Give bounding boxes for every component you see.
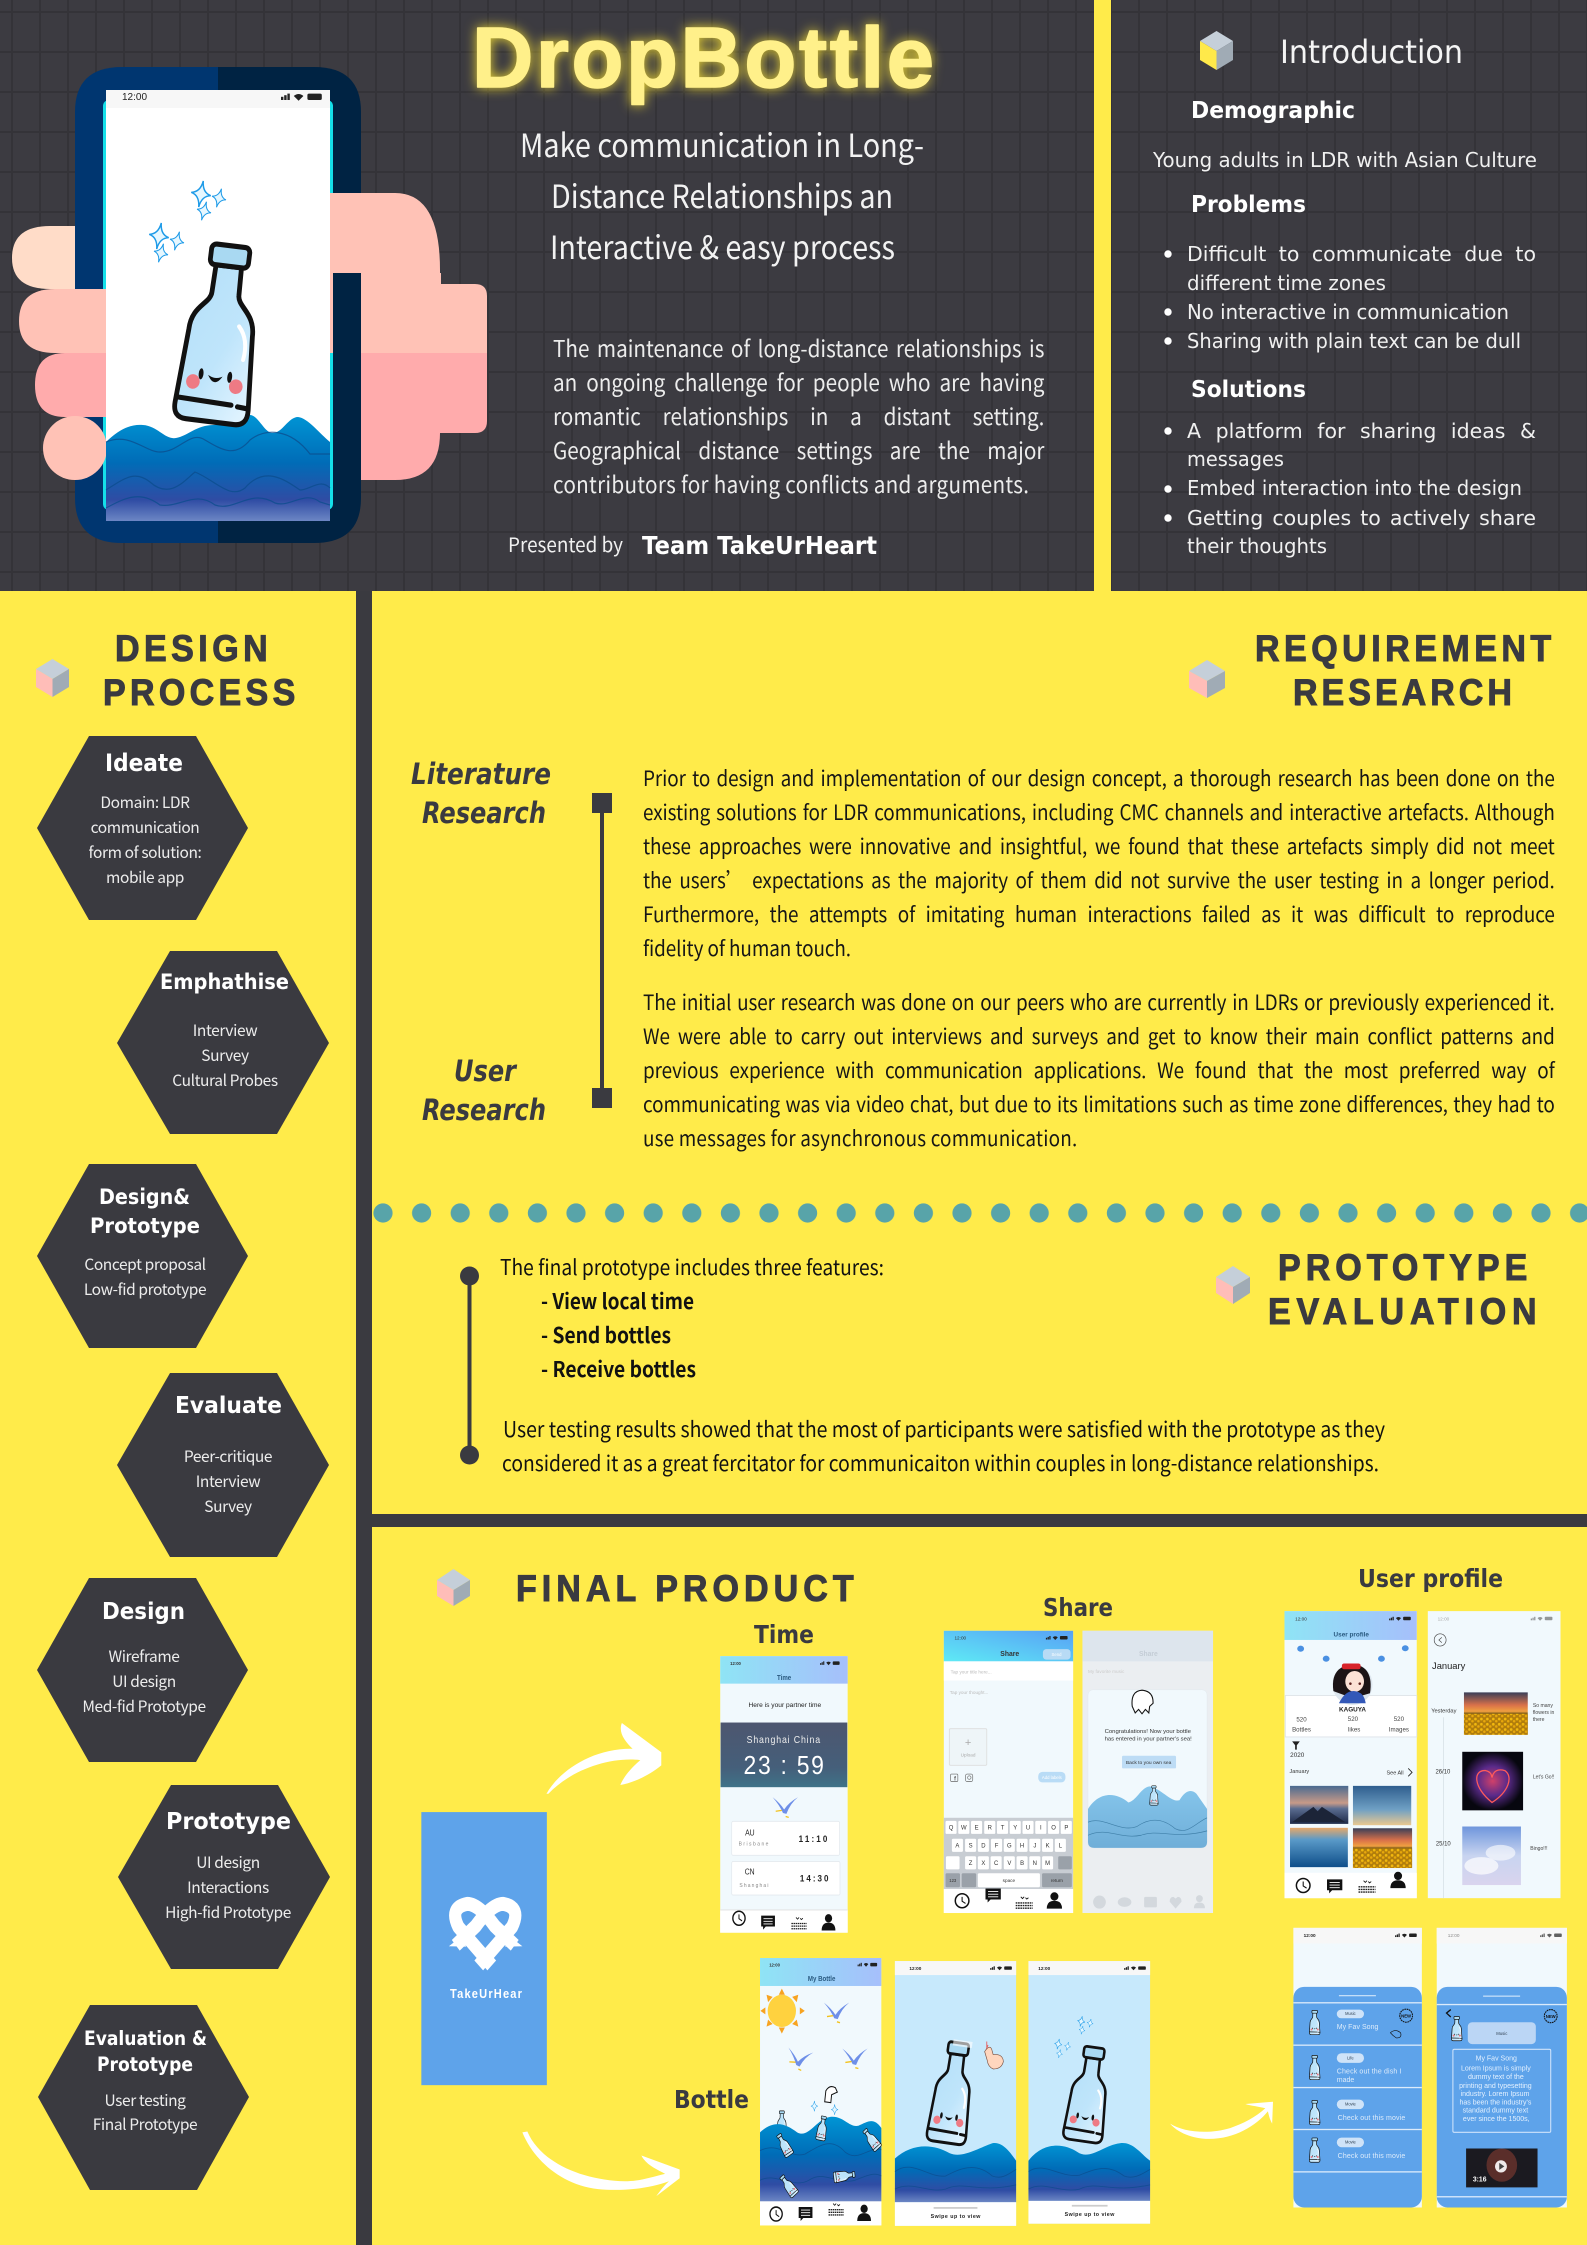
step: ideate: communication: [91, 816, 199, 838]
screen: share editor: Tap your title here...: [951, 1670, 992, 1676]
screen: time: 11:10: [799, 1834, 828, 1844]
screen: user profile: likes: [1348, 1727, 1360, 1734]
step: design: Design: [102, 1599, 185, 1625]
text: features: - Send bottles: [541, 1319, 671, 1350]
screen: user profile: 12:00: [1295, 1616, 1307, 1622]
screen: share confirmation: Share: [1139, 1651, 1158, 1658]
text: features: [500, 1251, 884, 1384]
screen: share editor: D: [981, 1843, 986, 1850]
tagline: Make communication in Long-: [520, 121, 924, 167]
step: design: Wireframe: [108, 1645, 180, 1667]
screen: share editor: Send: [1052, 1652, 1062, 1657]
screen: bottle list: Check out this movie: [1338, 2114, 1405, 2122]
justified bullet line: Getting couples to actively share: [1187, 506, 1536, 530]
screen: user profile: Bottles: [1292, 1727, 1311, 1734]
list text: problems: No interactive in communication: [1187, 300, 1509, 324]
screen: time: 23 : 59: [744, 1752, 824, 1780]
screen: time: Time: [777, 1675, 792, 1682]
heading: requirement research: REQUIREMENT: [1255, 628, 1552, 669]
screen: user profile: KAGUYA: [1339, 1707, 1366, 1714]
heading: design process: [103, 628, 295, 713]
arrow: to messages: [1170, 2102, 1273, 2139]
step: ideate: Ideate: [105, 749, 183, 777]
text: user research: use messages for asynchronous communication.: [643, 1123, 1077, 1153]
step: evaluate: Peer-critique: [184, 1445, 272, 1467]
step: evaluation and prototype: User testing: [104, 2089, 186, 2111]
screen: share confirmation: My favorite music: [1088, 1669, 1125, 1675]
text: literature research: the users’ expectations as the majority of them did not survive the user testing in a longer period.: [643, 865, 1555, 895]
screen: share editor: T: [1001, 1826, 1005, 1832]
heading: design process: PROCESS: [103, 672, 295, 713]
screen: bottle list: [1293, 1928, 1422, 2207]
tagline: Interactive & easy process: [550, 223, 895, 269]
screen: user timeline: So many: [1533, 1703, 1553, 1709]
step: prototype: UI design: [196, 1851, 260, 1873]
step: design: [37, 1578, 248, 1762]
arrow: to time: [546, 1723, 661, 1794]
screen: bottle list: My Fav Song: [1337, 2023, 1379, 2031]
step: prototype: Prototype: [166, 1809, 291, 1835]
heading: demographic: Demographic: [1191, 98, 1355, 124]
presenter credit: Team TakeUrHeart: [642, 531, 877, 560]
list text: problems: [1164, 250, 1521, 353]
step: emphathise: Interview: [193, 1019, 258, 1041]
text: evaluation results: [502, 1413, 1385, 1478]
label: literature research: Research: [422, 796, 546, 830]
screen: bottle list: Life: [1347, 2055, 1354, 2060]
step: design and prototype: Prototype: [90, 1214, 200, 1238]
screen: share editor: E: [975, 1826, 979, 1832]
step: emphathise: Survey: [201, 1044, 249, 1066]
label: user research: [422, 1054, 546, 1127]
screen: share editor: Add labels: [1042, 1775, 1062, 1780]
step: ideate: mobile app: [106, 866, 184, 888]
text: user research: The initial user research was done on our peers who are currently in LDRs or previously experienced it.: [643, 987, 1555, 1017]
text: evaluation results: User testing results showed that the most of participants were satisfied with the prototype as they: [503, 1413, 1385, 1444]
icon: cube: [36, 659, 69, 697]
label: user research: Research: [422, 1093, 546, 1127]
screen: user profile: 520: [1296, 1717, 1307, 1724]
text: literature research: these approaches were innovative and insightful, we found that these artefacts simply did not meet: [643, 831, 1555, 861]
tagline: Distance Relationships an: [551, 172, 893, 218]
text: literature research: existing solutions for LDR communications, including CMC channels and interactive artefacts. Although: [643, 797, 1555, 827]
step: design: Med-fid Prototype: [82, 1695, 206, 1717]
screen: share editor: B: [1020, 1861, 1024, 1867]
panel: introduction: [1111, 0, 1587, 591]
screen: swipe up with hand: Swipe up to view: [931, 2214, 981, 2220]
splash screen: TakeUrHeart logo: [421, 1812, 547, 2085]
screen: share editor: L: [1059, 1843, 1063, 1850]
screen: user profile: Images: [1389, 1727, 1409, 1734]
illustration: hand holding phone: 12:00: [122, 92, 147, 103]
step: design and prototype: Concept proposal: [84, 1253, 206, 1275]
screen: user timeline: Yesterday: [1431, 1708, 1457, 1715]
screen: user timeline: 25/10: [1436, 1842, 1451, 1848]
timeline: [460, 1266, 479, 1464]
screen: bottle detail: printing and typesetting: [1459, 2082, 1532, 2090]
text: literature research: fidelity of human touch.: [643, 933, 851, 963]
screen: share confirmation: [1082, 1631, 1213, 1913]
screen: user profile: 520: [1394, 1716, 1405, 1723]
text: literature research: Furthermore, the attempts of imitating human interactions failed as it was difficult to reproduce: [643, 899, 1555, 929]
screen: share editor: I: [1040, 1826, 1042, 1832]
screen: share confirmation: Back to you own sea: [1126, 1760, 1172, 1765]
tagline: [520, 121, 924, 269]
screen: bottle list: 12:00: [1304, 1933, 1316, 1939]
step: evaluate: Evaluate: [175, 1393, 282, 1419]
step: evaluate: Survey: [204, 1495, 252, 1517]
screen: user timeline: 26/10: [1435, 1770, 1451, 1776]
screen: time: [720, 1656, 848, 1933]
screen: bottle list: made: [1337, 2076, 1354, 2084]
screen: share editor: [944, 1631, 1073, 1913]
heading: problems: Problems: [1191, 192, 1306, 218]
title: DropBottle: [472, 11, 934, 106]
screen: share editor: Q: [949, 1826, 954, 1832]
text: literature research: Prior to design and implementation of our design concept, a thorough research has been done on the: [643, 763, 1555, 793]
screen: bottle list: Movie: [1345, 2102, 1356, 2107]
arrow: to bottle: [522, 2131, 680, 2196]
justified bullet line: Difficult to communicate due to: [1187, 242, 1536, 266]
screen: share editor: +: [965, 1737, 971, 1749]
label: bottle: Bottle: [674, 2085, 749, 2114]
step: evaluation and prototype: Final Prototype: [93, 2113, 197, 2135]
screen: share editor: Share: [1000, 1651, 1019, 1658]
screen: time: Shanghai China: [747, 1735, 821, 1746]
panel: design process: [36, 628, 330, 2190]
screen: time: Shanghai: [739, 1883, 768, 1889]
screen: bottle detail: My Fav Song: [1476, 2055, 1517, 2063]
step: design and prototype: Design&: [99, 1185, 190, 1209]
screen: bottle detail: 12:00: [1448, 1933, 1460, 1939]
screen: share editor: R: [988, 1826, 993, 1832]
presenter credit: [508, 529, 877, 560]
screen: bottle list: Check out the dish I: [1337, 2067, 1401, 2075]
step: design: UI design: [112, 1670, 176, 1692]
step: prototype: Interactions: [187, 1876, 269, 1898]
text: user research: previous experience with communication applications. We found that the most preferred way of: [643, 1055, 1555, 1085]
screen: bottle list: Movie: [1345, 2140, 1356, 2145]
step: design and prototype: [37, 1164, 248, 1348]
icon: cube: [1189, 660, 1225, 698]
heading: requirement research: [1255, 628, 1552, 713]
screen: time: Here is your partner time: [749, 1702, 822, 1709]
list text: solutions: Embed interaction into the design: [1187, 476, 1522, 500]
screen: my bottle: 12:00: [769, 1962, 780, 1967]
hero description: [553, 330, 1044, 500]
screen: share editor: Y: [1013, 1826, 1017, 1832]
screen: my bottle: My Bottle: [808, 1976, 836, 1983]
label: user research: User: [454, 1054, 517, 1088]
hero description: romantic relationships in a distant setting.: [553, 398, 1044, 432]
divider: teal dots: [373, 1203, 1587, 1223]
step: evaluation and prototype: Evaluation &: [84, 2027, 207, 2050]
list text: solutions: [1164, 427, 1522, 558]
screen: share editor: U: [1026, 1826, 1030, 1832]
heading: prototype evaluation: EVALUATION: [1268, 1291, 1537, 1332]
screen: user profile: 2020: [1290, 1752, 1305, 1759]
screen: user profile: See All: [1386, 1770, 1404, 1777]
screen: user profile: 520: [1348, 1716, 1359, 1723]
screen: share editor: V: [1007, 1861, 1011, 1867]
text: literature research: [643, 763, 1555, 963]
step: emphathise: [117, 951, 329, 1134]
screen: share editor: P: [1064, 1826, 1068, 1832]
list text: problems: different time zones: [1187, 271, 1386, 295]
screen: share editor: X: [981, 1861, 985, 1867]
list text: solutions: messages: [1187, 447, 1284, 471]
divider bar: [372, 1514, 1587, 1527]
screen: time: AU: [745, 1828, 755, 1838]
screen: share confirmation: Congratulations! Now your bottle: [1105, 1729, 1191, 1735]
text: features: - View local time: [541, 1285, 694, 1316]
step: ideate: Domain: LDR: [100, 791, 190, 813]
screen: share editor: W: [961, 1826, 967, 1832]
screen: share editor: C: [994, 1861, 999, 1867]
step: evaluate: Interview: [196, 1470, 261, 1492]
screen: time: CN: [745, 1867, 755, 1877]
screen: user profile: [1284, 1611, 1417, 1898]
screen: swipe up with sparkles: [1028, 1961, 1150, 2224]
text: demographic: Young adults in LDR with Asian Culture: [1152, 148, 1537, 172]
hero description: Geographical distance settings are the major: [553, 432, 1044, 466]
illustration: hand holding phone: [12, 67, 487, 543]
list text: problems: Sharing with plain text can be dull: [1187, 329, 1521, 353]
screen: share editor: S: [969, 1843, 973, 1850]
screen: user timeline: January: [1432, 1661, 1466, 1672]
screen: bottle detail: has been the industry's: [1459, 2098, 1532, 2106]
step: prototype: [118, 1785, 330, 1969]
heading: prototype evaluation: [1268, 1247, 1537, 1332]
screen: time: 14:30: [800, 1873, 829, 1884]
screen: user profile: User profile: [1334, 1631, 1369, 1638]
hero description: contributors for having conflicts and arguments.: [553, 466, 1029, 500]
justified bullet line: A platform for sharing ideas &: [1187, 419, 1536, 443]
screen: user profile: January: [1290, 1769, 1309, 1775]
presenter credit: Presented by: [508, 529, 624, 558]
screen: share editor: M: [1045, 1861, 1050, 1867]
panel: final product: [421, 1564, 1567, 2226]
screen: share editor: F: [995, 1843, 999, 1850]
hero description: The maintenance of long-distance relationships is: [553, 330, 1044, 364]
heading: solutions: Solutions: [1191, 377, 1306, 403]
screen: swipe up with sparkles: 12:00: [1038, 1966, 1051, 1972]
step: design and prototype: Low-fid prototype: [84, 1278, 206, 1300]
screen: share editor: f: [954, 1777, 957, 1783]
screen: user timeline: Let's Go!!: [1533, 1774, 1554, 1780]
screen: bottle detail: 3:16: [1473, 2176, 1487, 2183]
screen: bottle detail: standard dummy text: [1463, 2107, 1528, 2115]
step: ideate: form of solution:: [89, 841, 202, 863]
screen: user timeline: there: [1533, 1717, 1545, 1723]
text: evaluation results: considered it as a great fercitator for communicaiton within couples in long-distance relationships.: [502, 1447, 1379, 1478]
label: share: Share: [1043, 1593, 1113, 1622]
screen: bottle detail: [1437, 1928, 1567, 2207]
screen: share editor: return: [1051, 1878, 1063, 1884]
screen: share editor: space: [1003, 1879, 1015, 1884]
step: evaluation and prototype: Prototype: [97, 2053, 193, 2076]
screen: my bottle: [760, 1958, 882, 2225]
splash screen: TakeUrHeart logo: TakeUrHear: [450, 1987, 522, 2001]
text: features: The final prototype includes three features:: [500, 1251, 884, 1282]
icon: cube: [1216, 1266, 1250, 1304]
screen: time: Brisbane: [739, 1841, 768, 1848]
panel: requirement research: [411, 628, 1556, 1153]
text: features: - Receive bottles: [541, 1353, 696, 1384]
screen: share editor: 123: [949, 1878, 957, 1883]
label: literature research: Literature: [411, 757, 551, 791]
list text: solutions: their thoughts: [1187, 534, 1327, 558]
screen: bottle detail: dummy text of the: [1468, 2073, 1524, 2081]
screen: share editor: N: [1033, 1861, 1037, 1867]
screen: share editor: H: [1020, 1843, 1024, 1850]
icon: cube: [437, 1569, 470, 1606]
screen: bottle detail: industry. Lorem Ipsum: [1461, 2090, 1530, 2098]
screen: share editor: Upload: [961, 1753, 976, 1759]
screen: swipe up with hand: 12:00: [909, 1966, 922, 1972]
screen: share editor: K: [1046, 1843, 1050, 1850]
screen: swipe up with hand: [895, 1961, 1016, 2226]
screen: user timeline: flowers in: [1533, 1710, 1554, 1716]
step: evaluation and prototype: [38, 2005, 249, 2190]
screen: bottle detail: Music: [1496, 2031, 1508, 2036]
screen: user timeline: [1428, 1611, 1561, 1898]
step: emphathise: Emphathise: [160, 970, 289, 994]
screen: bottle detail: Lorem Ipsum is simply: [1461, 2065, 1531, 2073]
screen: share editor: G: [1007, 1843, 1012, 1850]
heading: introduction: Introduction: [1280, 33, 1463, 71]
label: user profile: User profile: [1358, 1564, 1503, 1593]
heading: design process: DESIGN: [115, 628, 268, 669]
step: emphathise: Cultural Probes: [172, 1069, 278, 1091]
panel: prototype evaluation: [460, 1247, 1537, 1478]
text: user research: We were able to carry out interviews and surveys and get to know their main conflict patterns and: [643, 1021, 1555, 1051]
icon: cube: [1200, 31, 1233, 70]
heading: prototype evaluation: PROTOTYPE: [1278, 1247, 1527, 1288]
heading: final product: FINAL PRODUCT: [516, 1568, 854, 1609]
step: prototype: High-fid Prototype: [165, 1901, 291, 1923]
hero description: an ongoing challenge for people who are having: [553, 364, 1044, 398]
screen: user timeline: Bingo!!!: [1530, 1846, 1548, 1852]
screen: bottle list: Check out this movie: [1338, 2152, 1405, 2160]
panel: hero: [0, 0, 1094, 591]
screen: share confirmation: has entered in your partner's sea!: [1105, 1736, 1192, 1742]
screen: bottle list: Music: [1345, 2011, 1356, 2016]
screen: share editor: Tap your thought...: [950, 1690, 988, 1696]
screen: share editor: Z: [969, 1861, 973, 1867]
timeline: [592, 793, 612, 1108]
screen: share editor: A: [955, 1843, 959, 1850]
screen: bottle detail: ever since the 1500s,: [1463, 2115, 1530, 2123]
label: time: Time: [754, 1620, 814, 1649]
step: evaluate: [117, 1373, 329, 1557]
screen: time: 12:00: [730, 1661, 741, 1666]
screen: swipe up with sparkles: Swipe up to view: [1065, 2212, 1115, 2218]
screen: share editor: O: [1051, 1826, 1056, 1832]
heading: requirement research: RESEARCH: [1293, 672, 1512, 713]
divider bars: [356, 591, 372, 2245]
step: ideate: [37, 736, 248, 920]
text: user research: communicating was via video chat, but due to its limitations such as time zone differences, they had to: [643, 1089, 1555, 1119]
label: literature research: [411, 757, 551, 830]
screen: share editor: J: [1033, 1843, 1036, 1850]
screen: share editor: 12:00: [954, 1635, 966, 1642]
screen: user timeline: 12:00: [1438, 1616, 1450, 1622]
text: user research: [643, 987, 1556, 1153]
